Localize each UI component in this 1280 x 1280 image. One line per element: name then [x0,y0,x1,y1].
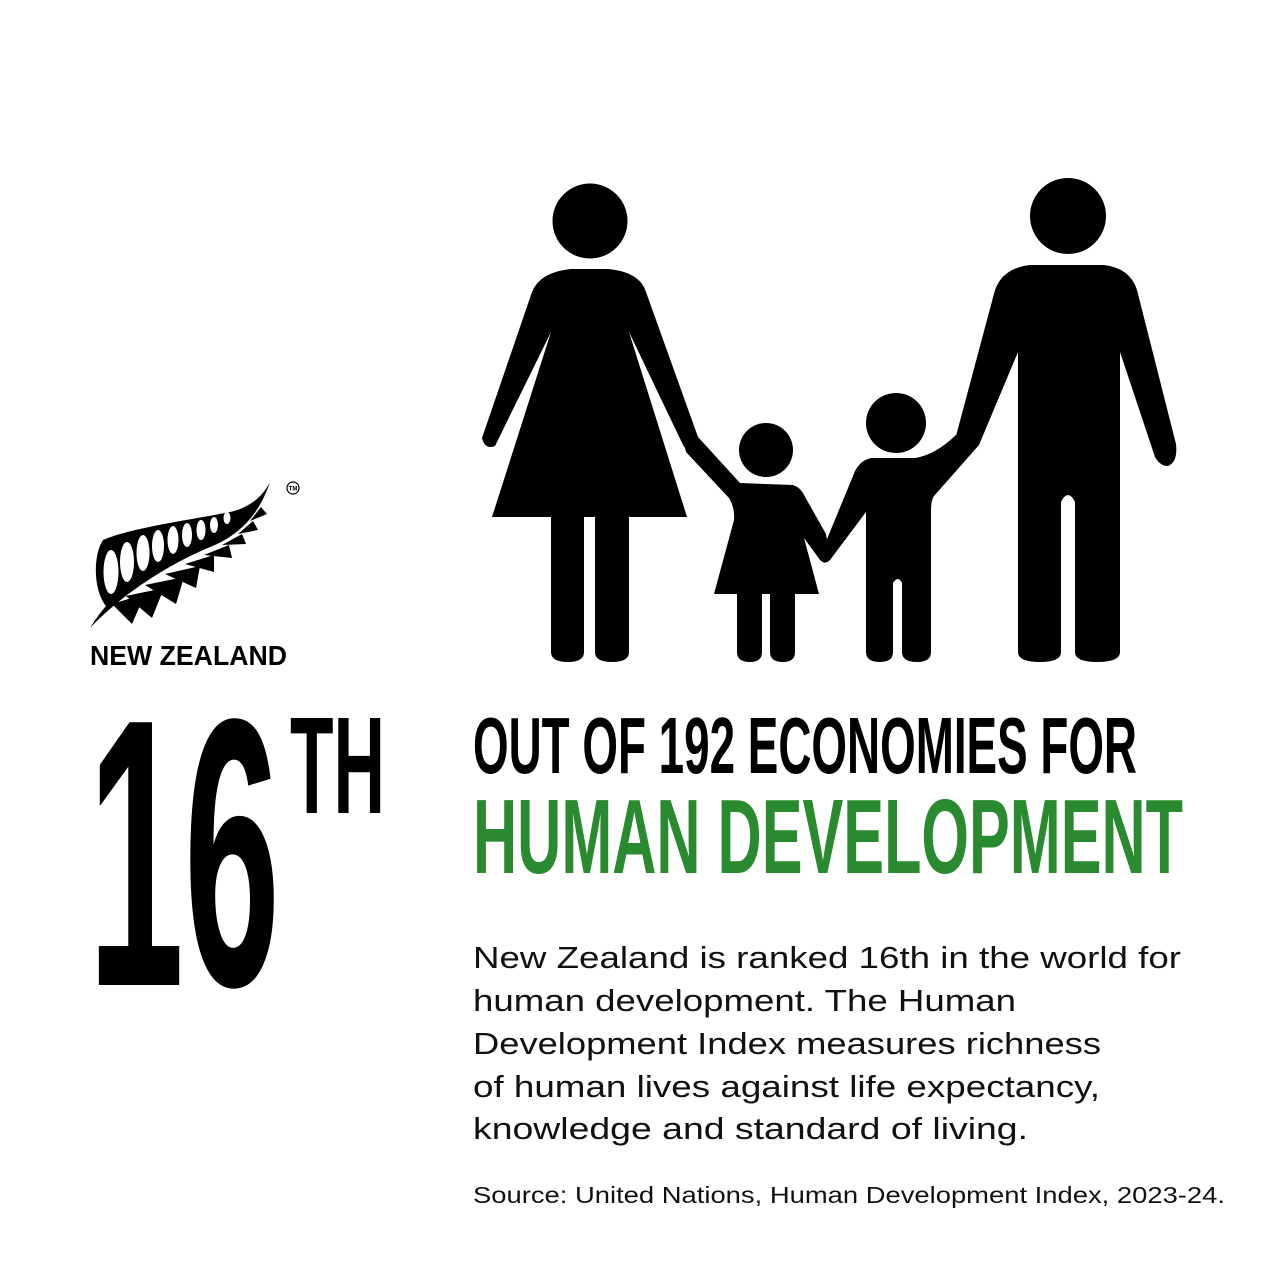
trademark [287,482,299,494]
logo: silver fern [90,482,299,671]
source note: Source: United Nations, Human Development Index, 2023-24. [473,1182,1225,1208]
illustration: family [482,178,1176,662]
figure: girl [684,423,830,662]
heading [473,701,1183,896]
logo text: NEW ZEALAND [90,640,287,671]
trademark: TM [289,486,297,492]
body text: New Zealand is ranked 16th in the world for [473,940,1181,975]
body text: of human lives against life expectancy, [473,1069,1100,1104]
body text: human development. The Human [473,983,1016,1018]
rank: 16th: TH [290,689,385,843]
figure: man [956,178,1176,662]
icon: fern [90,482,270,628]
rank: 16th [88,639,385,1066]
body text: knowledge and standard of living. [473,1111,1028,1146]
body text [473,940,1181,1146]
body text: Development Index measures richness [473,1026,1101,1061]
figure: woman [482,184,698,662]
rank: 16th: 16 [88,639,280,1066]
figure: boy [820,393,979,662]
